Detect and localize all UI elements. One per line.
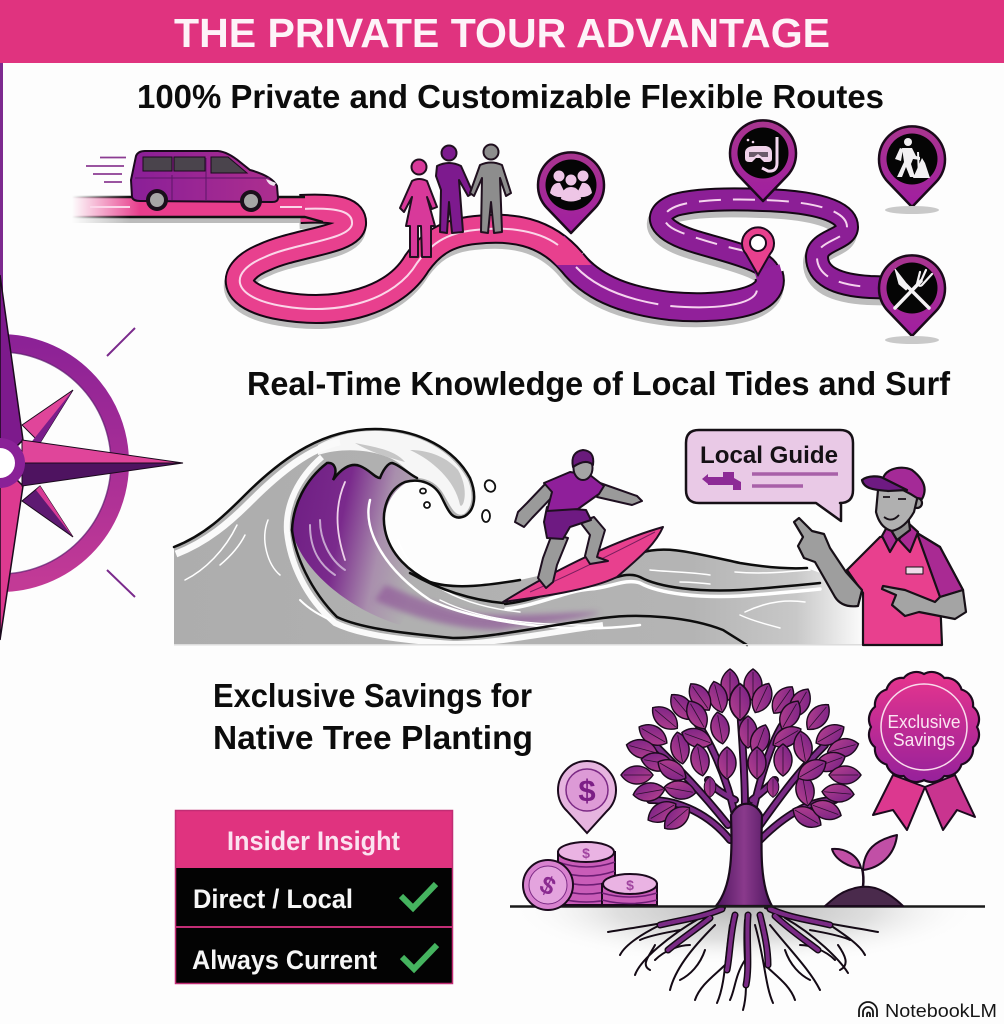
pin: hiking (879, 126, 945, 207)
coin stack (523, 842, 657, 910)
insider insight table: Always Current (192, 945, 377, 975)
flat road start (72, 197, 323, 222)
surfer shorts (544, 507, 591, 539)
bubble label: Local Guide (700, 442, 838, 469)
insider insight table: Direct / Local (193, 884, 353, 914)
coin stack: $ (535, 870, 560, 902)
check mark (401, 884, 436, 908)
title: THE PRIVATE TOUR ADVANTAGE (174, 10, 830, 56)
tree trunk (716, 804, 772, 906)
speed lines (86, 158, 126, 182)
badge text: Exclusive (888, 712, 960, 732)
wave tube (292, 463, 430, 625)
pin: dollar (558, 761, 616, 833)
purple wash in wave (375, 585, 600, 630)
speech bubble: local guide (686, 430, 853, 521)
guide ear (912, 498, 922, 508)
pin: group activity (538, 152, 604, 233)
icon: notebooklm logo (859, 1002, 877, 1017)
title banner (0, 0, 1004, 63)
spray droplets (420, 478, 497, 522)
tree branches (650, 700, 835, 840)
heading: savings: Native Tree Planting (213, 719, 533, 756)
ground line (510, 905, 985, 908)
insider insight table: Insider Insight (227, 826, 400, 856)
wave foam crest (318, 431, 471, 515)
icon: mask and snorkel (745, 137, 777, 171)
tree (608, 669, 878, 1010)
guide shirt (847, 533, 963, 645)
surfer head (574, 456, 592, 480)
bubble text lines (752, 474, 838, 486)
heading: savings (213, 677, 533, 756)
guide other arm (882, 586, 966, 619)
table row: direct local (175, 868, 453, 926)
coin stack: $ (626, 877, 634, 893)
left edge line (0, 63, 3, 303)
surfer shirt (544, 472, 604, 511)
compass (0, 275, 183, 640)
exclusive savings badge (869, 672, 979, 830)
tree leaves (621, 669, 861, 835)
local guide figure (794, 468, 966, 645)
pink traveller (400, 160, 437, 257)
icon: fork and knife (895, 269, 932, 308)
heading: savings: Exclusive Savings for (213, 677, 532, 714)
tree roots (608, 908, 878, 1010)
badge text: Savings (893, 730, 955, 750)
leaning coin (523, 860, 573, 910)
wave illustration (174, 429, 865, 646)
purple traveller (436, 146, 473, 233)
guide face (876, 480, 918, 531)
table header (175, 810, 453, 868)
surfer (503, 450, 663, 602)
road purple fill (555, 199, 905, 307)
table row: always current (175, 926, 453, 928)
badge ribbons (873, 775, 925, 830)
compass streaks (107, 328, 135, 597)
guide cap (883, 468, 925, 499)
heading: tides: Real-Time Knowledge of Local Tides and Surf (247, 365, 951, 402)
icon: van (131, 151, 278, 212)
compass ring (0, 343, 120, 583)
surfer limbs (515, 482, 642, 588)
surfboard (503, 527, 663, 602)
badge seal (869, 672, 979, 782)
wave body (174, 429, 865, 645)
main points (0, 275, 23, 463)
badge text (888, 712, 960, 750)
heading: routes: 100% Private and Customizable Flexible Routes (137, 78, 884, 115)
guide pointing arm (794, 518, 862, 606)
icon: hiker (895, 138, 930, 178)
back stack (558, 852, 615, 905)
wave outlines (174, 429, 820, 645)
bubble tide icon (702, 472, 741, 490)
check mark (402, 945, 437, 969)
winding road (72, 197, 905, 314)
road pink fill (240, 209, 590, 309)
small location pin (742, 227, 774, 275)
wave swirls (185, 482, 820, 628)
coin stack: $ (582, 845, 590, 861)
icon: group of travellers (400, 144, 511, 257)
pin: dining (879, 255, 945, 336)
icon: people (550, 170, 592, 202)
road outlines (240, 199, 905, 309)
insider insight table (175, 810, 453, 984)
sapling (825, 835, 903, 906)
pin shadow (885, 206, 939, 214)
notebooklm mark: NotebookLM (885, 1000, 997, 1021)
secondary points (22, 390, 73, 443)
guide collar (882, 522, 918, 552)
guide neck (888, 505, 910, 540)
bottom edge (174, 644, 864, 646)
pin shadow (885, 336, 939, 344)
white band around tube (287, 457, 603, 644)
pin: dollar: $ (578, 773, 596, 808)
pin: snorkel (730, 120, 796, 201)
right stack (602, 884, 657, 905)
soil shadow (510, 908, 980, 1024)
grey traveller (470, 144, 511, 233)
